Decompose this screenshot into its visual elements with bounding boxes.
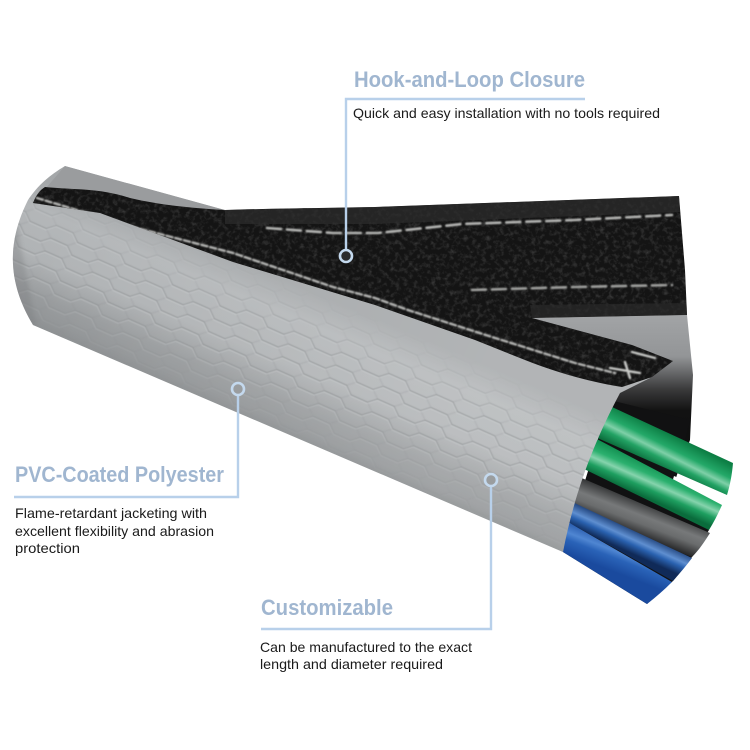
callout: Customizable [260, 474, 497, 672]
heading: Customizable [261, 595, 393, 620]
leader line [346, 99, 585, 250]
callout: PVC-Coated Polyester [14, 383, 244, 556]
white gap between cables [671, 476, 726, 505]
heading: Hook-and-Loop Closure [354, 67, 585, 92]
marker ring [232, 383, 244, 395]
description: length and diameter required [260, 656, 443, 672]
sleeve with cables [0, 150, 733, 604]
cable: blue outer [536, 509, 672, 604]
infographic canvas [12, 71, 733, 672]
marker ring [340, 250, 352, 262]
black hook-and-loop strip [33, 187, 687, 387]
description: Quick and easy installation with no tools required [353, 105, 660, 121]
cable: blue inner [548, 495, 692, 581]
leader line [14, 395, 238, 497]
description: protection [15, 540, 80, 556]
cable: green upper [568, 394, 733, 495]
marker ring [485, 474, 497, 486]
inner lining of sleeve [532, 315, 693, 480]
dark cavity behind cables [563, 400, 709, 604]
description: Flame-retardant jacketing with [15, 505, 207, 521]
cable: green lower [555, 424, 722, 530]
description: Can be manufactured to the exact [260, 639, 472, 655]
description: excellent flexibility and abrasion [15, 523, 214, 539]
cable: black [541, 464, 710, 557]
heading: PVC-Coated Polyester [15, 462, 224, 487]
leader line [261, 487, 491, 629]
callout: Hook-and-Loop Closure [340, 67, 660, 262]
grey PVC jacket [12, 166, 650, 552]
stitching [37, 198, 672, 378]
